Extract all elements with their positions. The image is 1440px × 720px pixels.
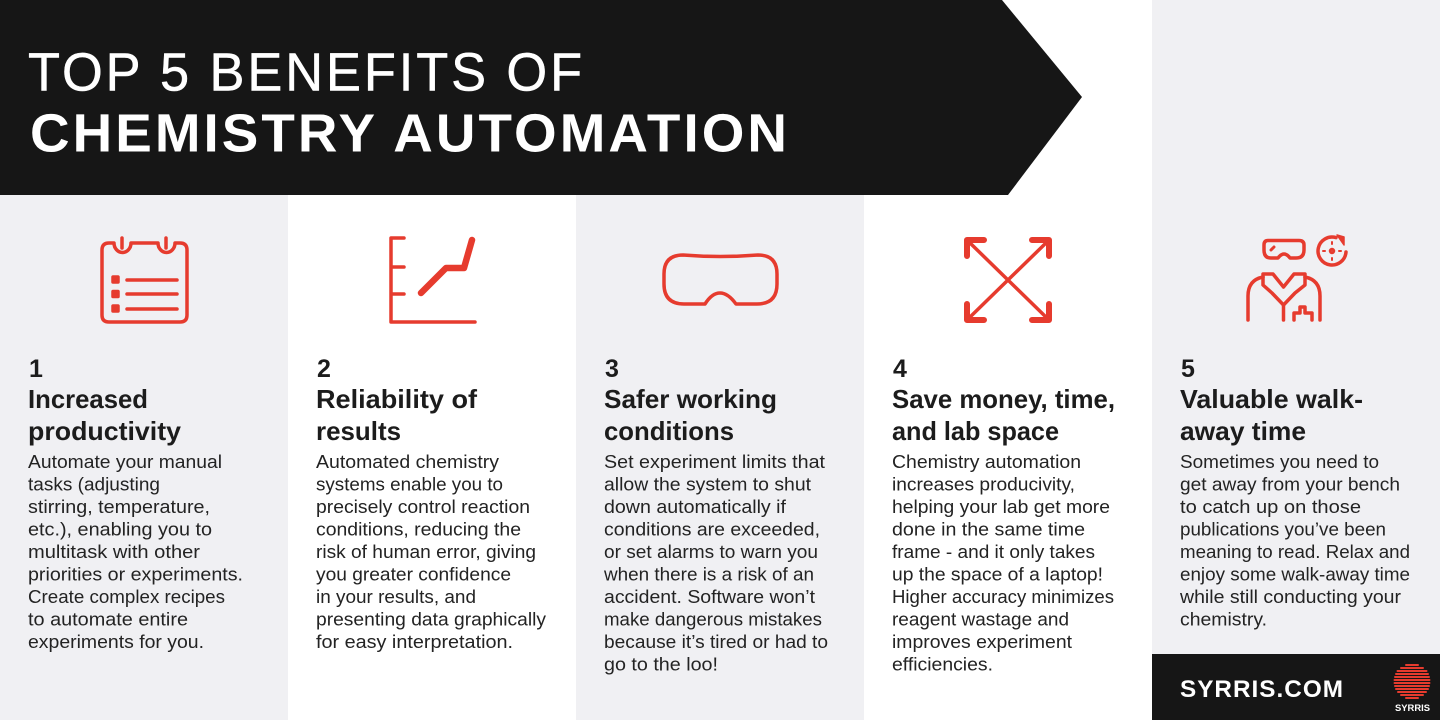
icon: line chart — [391, 238, 475, 322]
heading: benefit 4 — [892, 355, 1115, 446]
text: benefit 2 body: risk of human error, giving — [316, 541, 536, 562]
text: benefit 5 body: meaning to read. Relax and — [1180, 541, 1410, 562]
panel: benefit 1 background — [0, 195, 288, 720]
footer bar — [1152, 654, 1440, 720]
text: benefit 1 body: multitask with other — [28, 541, 200, 562]
title — [28, 42, 790, 164]
text: benefit 3 body: Set experiment limits that — [604, 451, 825, 472]
heading: benefit 2: 2 — [317, 355, 331, 383]
text: benefit 5 body: Sometimes you need to — [1180, 451, 1379, 472]
text: benefit 1 body: Automate your manual — [28, 451, 222, 472]
text: benefit 3 body: or set alarms to warn you — [604, 541, 818, 562]
heading: benefit 1: productivity — [28, 416, 182, 446]
text: benefit 5 body — [1179, 451, 1410, 630]
text: benefit 2 body: you greater confidence — [316, 564, 511, 584]
panel: benefit 3 background — [576, 195, 864, 720]
heading: benefit 5: 5 — [1181, 355, 1195, 383]
text: benefit 1 body: to automate entire — [28, 608, 188, 630]
text: benefit 2 body: for easy interpretation. — [316, 631, 513, 652]
text: benefit 2 body: presenting data graphically — [316, 608, 547, 630]
text: benefit 1 body: stirring, temperature, — [28, 496, 210, 517]
heading: benefit 5 — [1180, 355, 1363, 446]
text: benefit 4 body: efficiencies. — [892, 654, 993, 674]
text: benefit 1 body — [28, 451, 243, 652]
text: benefit 1 body: tasks (adjusting — [28, 474, 160, 494]
text: benefit 1 body: etc.), enabling you to — [28, 518, 212, 540]
text: benefit 3 body: because it’s tired or had to — [604, 631, 828, 652]
text: benefit 4 body: Higher accuracy minimizes — [892, 586, 1114, 607]
text: benefit 3 body: conditions are exceeded, — [604, 518, 820, 540]
text: benefit 5 body: while still conducting your — [1179, 586, 1401, 607]
title: CHEMISTRY AUTOMATION — [30, 104, 790, 164]
text: benefit 2 body: precisely control reaction — [316, 496, 530, 517]
text: benefit 4 body: helping your lab get more — [892, 496, 1110, 517]
text: benefit 4 body: done in the same time — [892, 518, 1085, 540]
heading: benefit 5: away time — [1180, 416, 1306, 446]
title banner arrow — [0, 0, 1082, 195]
heading: benefit 4: and lab space — [892, 416, 1059, 446]
text: benefit 4 body: increases producivity, — [892, 474, 1075, 494]
text: benefit 2 body: in your results, and — [316, 586, 476, 607]
text: benefit 3 body: when there is a risk of an — [603, 564, 814, 584]
text: benefit 4 body: improves experiment — [892, 631, 1072, 652]
heading: benefit 2: Reliability of — [316, 384, 477, 414]
heading: benefit 4: 4 — [893, 355, 907, 383]
text: benefit 3 body: make dangerous mistakes — [604, 608, 822, 630]
text: benefit 5 body: enjoy some walk-away time — [1180, 564, 1410, 584]
text: benefit 1 body: Create complex recipes — [28, 586, 225, 607]
text: benefit 1 body: experiments for you. — [28, 631, 204, 652]
heading: benefit 1: Increased — [28, 384, 148, 414]
footer url: SYRRIS.COM — [1180, 676, 1344, 703]
heading: benefit 2: results — [316, 416, 401, 446]
heading: benefit 2 — [316, 355, 477, 446]
text: benefit 4 body: frame - and it only takes — [892, 541, 1095, 562]
heading: benefit 4: Save money, time, — [892, 384, 1115, 414]
icon: scientist with goggles and clock — [1248, 235, 1346, 320]
text: benefit 5 body: to catch up on those — [1180, 496, 1361, 517]
heading: benefit 3: 3 — [605, 355, 619, 383]
text: benefit 2 body: systems enable you to — [316, 474, 503, 494]
text: benefit 3 body — [603, 451, 828, 674]
text: benefit 2 body: Automated chemistry — [316, 451, 500, 472]
icon: expanding arrows — [967, 240, 1049, 320]
icon: calendar checklist — [102, 238, 187, 322]
text: benefit 4 body: up the space of a laptop! — [892, 564, 1103, 584]
heading: benefit 1: 1 — [29, 355, 43, 383]
text: benefit 3 body: accident. Software won’t — [604, 586, 815, 607]
text: benefit 3 body: down automatically if — [604, 496, 787, 517]
text: benefit 5 body: get away from your bench — [1180, 474, 1400, 494]
text: benefit 4 body — [892, 451, 1114, 674]
heading: benefit 3: Safer working — [604, 384, 777, 414]
text: benefit 2 body: conditions, reducing the — [316, 518, 521, 540]
heading: benefit 3: conditions — [604, 416, 734, 446]
text: benefit 2 body — [316, 451, 547, 652]
text: benefit 5 body: chemistry. — [1180, 608, 1267, 630]
text: benefit 4 body: Chemistry automation — [892, 451, 1081, 472]
text: benefit 3 body: allow the system to shut — [604, 474, 811, 494]
text: benefit 1 body: priorities or experiments. — [28, 564, 243, 584]
panel: benefit 5 background — [1152, 0, 1440, 720]
logo: Syrris — [1394, 665, 1430, 714]
icon: safety goggles — [664, 255, 777, 304]
text: benefit 3 body: go to the loo! — [604, 654, 718, 674]
text: benefit 5 body: publications you’ve been — [1180, 518, 1386, 540]
heading: benefit 5: Valuable walk- — [1180, 384, 1363, 414]
logo: Syrris: SYRRIS — [1395, 703, 1430, 714]
title: TOP 5 BENEFITS OF — [28, 42, 585, 102]
heading: benefit 3 — [604, 355, 777, 446]
heading: benefit 1 — [28, 355, 182, 446]
text: benefit 4 body: reagent wastage and — [892, 608, 1069, 630]
